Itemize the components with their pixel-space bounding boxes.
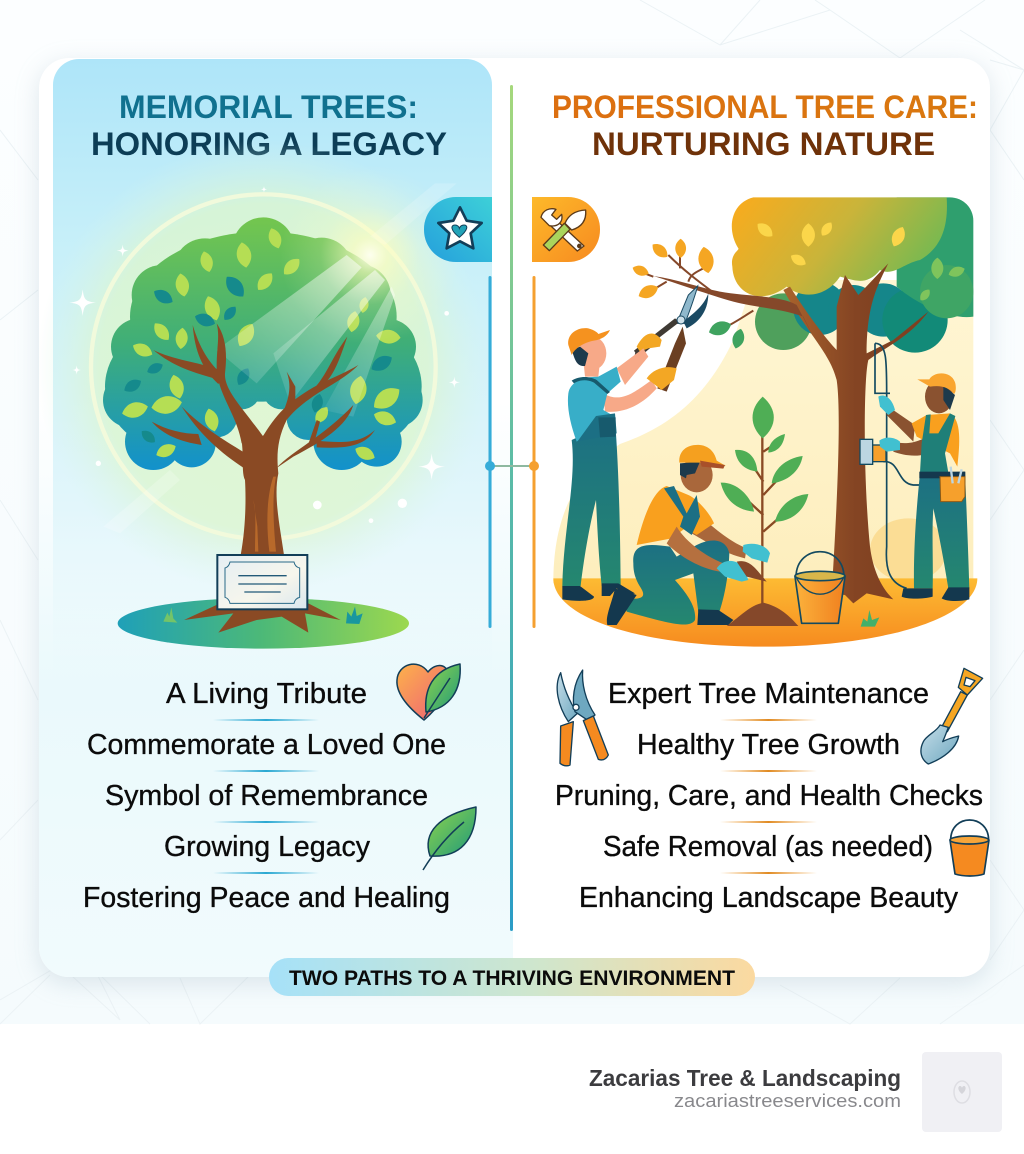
list: professional care: Enhancing Landscape Beauty — [579, 882, 958, 914]
memorial plaque — [217, 555, 307, 609]
list: professional care: Pruning, Care, and Health Checks — [555, 780, 983, 812]
cream backdrop — [553, 280, 973, 583]
footer logo tile — [922, 1052, 1002, 1132]
main card — [39, 58, 990, 977]
canopy — [103, 217, 423, 470]
list: memorial trees: A Living Tribute — [166, 678, 367, 710]
glow and ring — [37, 140, 490, 593]
title: professional tree care: NURTURING NATURE — [592, 126, 935, 162]
worker: climbing — [878, 373, 969, 601]
panel: memorial trees background — [53, 59, 492, 700]
grass tufts — [163, 607, 363, 624]
climbing rope and tool box — [875, 343, 927, 588]
list: memorial trees: Symbol of Remembrance — [105, 780, 428, 812]
worker: planting — [607, 445, 770, 625]
banner: two paths: TWO PATHS TO A THRIVING ENVIRONMENT — [289, 967, 735, 990]
list: memorial trees: Commemorate a Loved One — [87, 729, 446, 761]
footer brand text: zacariastreeservices.com — [674, 1091, 901, 1111]
badge: star with heart — [424, 197, 492, 262]
list: professional care: Healthy Tree Growth — [637, 729, 900, 761]
icon: heart and leaf — [397, 664, 460, 720]
seedling — [721, 397, 808, 608]
worker: pruning — [562, 328, 677, 601]
title: professional tree care: PROFESSIONAL TREE CARE: — [552, 89, 978, 125]
tree canopy — [732, 197, 973, 353]
illustration: memorial tree — [37, 140, 490, 649]
title: memorial trees — [91, 89, 447, 162]
icon: leaf — [423, 807, 476, 870]
list dividers: memorial trees — [213, 719, 319, 874]
footer brand text: Zacarias Tree & Landscaping — [589, 1065, 901, 1091]
sparkles — [69, 186, 460, 523]
bucket — [795, 552, 845, 623]
ground — [553, 578, 977, 647]
list dividers: professional care — [720, 719, 817, 874]
trunk and branches — [152, 323, 375, 633]
list: professional care: Safe Removal (as needed) — [603, 831, 933, 863]
list: memorial trees: Fostering Peace and Healing — [83, 882, 450, 914]
footer brand text — [589, 1065, 901, 1111]
illustration: tree care scene — [553, 197, 977, 647]
title: professional tree care — [552, 89, 978, 162]
list: memorial trees: Growing Legacy — [164, 831, 370, 863]
trunk highlights — [253, 477, 276, 552]
badge: crossed tools — [532, 197, 600, 262]
title: memorial trees: HONORING A LEGACY — [91, 126, 447, 162]
pruning shears — [634, 286, 708, 392]
icon: bucket — [950, 820, 989, 876]
title: memorial trees: MEMORIAL TREES: — [119, 89, 418, 125]
icon: pruners — [557, 670, 608, 766]
icon: shovel — [921, 668, 983, 764]
list: professional care — [555, 678, 983, 914]
list: memorial trees — [83, 678, 450, 914]
small grass — [861, 610, 879, 627]
leaves — [120, 226, 404, 463]
tree trunk — [783, 263, 928, 603]
center divider lines and connector — [485, 85, 539, 931]
sun rays — [103, 165, 460, 533]
soil mound — [727, 603, 798, 626]
tool box — [860, 439, 886, 464]
ground — [118, 598, 409, 649]
list: professional care: Expert Tree Maintenance — [608, 678, 929, 710]
banner: two paths — [269, 958, 755, 996]
pruned branch with leaves — [631, 239, 813, 350]
